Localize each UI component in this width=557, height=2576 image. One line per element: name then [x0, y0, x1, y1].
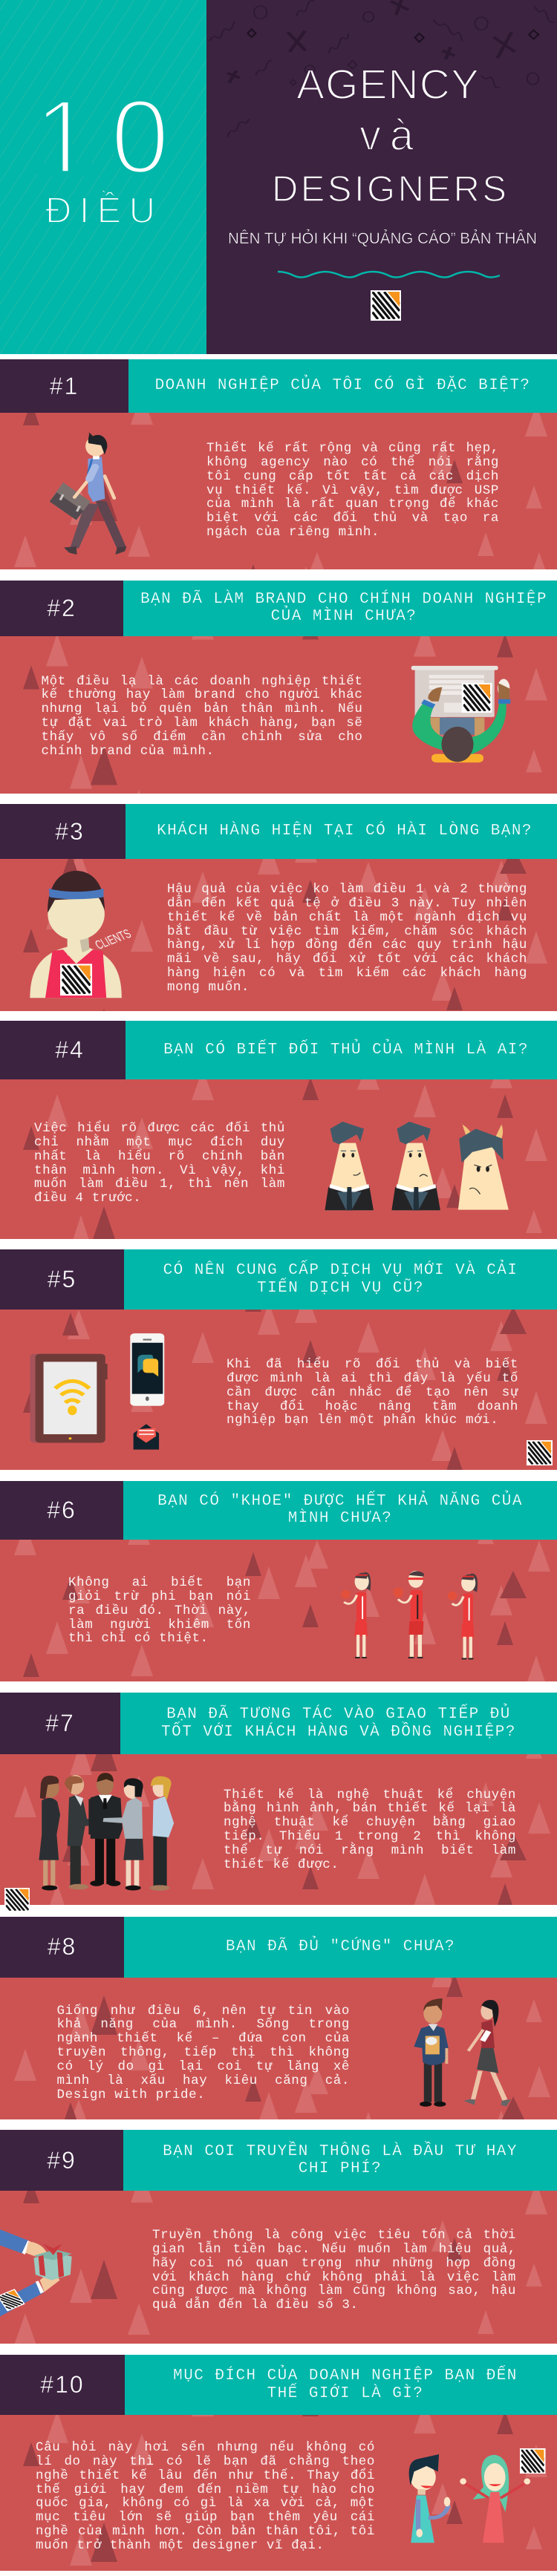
body text 4: thân mình hơn. Vì vậy, khi	[34, 1163, 285, 1178]
word designers: DESIGNERS	[272, 169, 506, 209]
body text 6: thì chỉ có thiệt.	[68, 1631, 209, 1646]
heading 2: CỦA MÌNH CHƯA?	[271, 608, 417, 625]
body text 7: bằng hình ảnh, bán thiết kế lại là	[224, 1801, 516, 1816]
body text 9: Truyền thông là công việc tiêu tốn cả thời	[152, 2228, 516, 2243]
body text 5: được mình là ai thì đây là yếu tố	[227, 1371, 518, 1386]
body text 8: Giống như điều 6, nên tự tin vào	[56, 2004, 350, 2018]
doodle background	[209, 0, 554, 137]
number badge 6	[0, 1481, 123, 1540]
panel background 3	[0, 859, 557, 1011]
body text 3: Hậu quả của việc ko làm điều 1 và 2 thường	[167, 882, 527, 897]
illustration: three rival characters	[325, 1121, 509, 1210]
section 5	[0, 1249, 557, 1470]
body text 10: muốn trở thành một designer vĩ đại.	[36, 2538, 325, 2553]
body text 10: quốc gia, không có gì là xa vời cả, một	[36, 2496, 375, 2511]
section 10	[0, 2355, 557, 2571]
number badge 7	[0, 1693, 120, 1754]
number badge 10: #10	[40, 2371, 85, 2398]
heading 5: CÓ NÊN CUNG CẤP DỊCH VỤ MỚI VÀ CẢI	[163, 1262, 518, 1279]
body text 10: lí do này thì có lẽ bạn đã chẳng theo	[36, 2454, 375, 2469]
heading 7: BẠN ĐÃ TƯƠNG TÁC VÀO GIAO TIẾP ĐỦ	[166, 1706, 511, 1723]
illustration: client portrait	[30, 871, 134, 998]
body text 9	[152, 2229, 516, 2312]
number badge 3	[0, 804, 126, 859]
body text 8: khả năng của mình. Sống trong	[56, 2017, 350, 2032]
section 2	[0, 581, 557, 794]
number badge 5	[0, 1249, 124, 1310]
wave divider	[278, 270, 500, 278]
heading 9: BẠN COI TRUYỀN THÔNG LÀ ĐẦU TƯ HAY	[163, 2143, 518, 2160]
body text 4: Việc hiểu rõ được các đối thủ	[34, 1121, 285, 1136]
body text 10	[36, 2441, 375, 2553]
word dieu: ĐIỀU	[45, 191, 155, 231]
heading 5	[124, 1249, 557, 1310]
body text 3	[167, 882, 527, 995]
body text 10: nghề của mình hơn. Còn bản thân tôi, tôi	[36, 2524, 375, 2539]
heading 7: TỐT VỚI KHÁCH HÀNG VÀ ĐỒNG NGHIỆP?	[161, 1724, 516, 1740]
word agency: AGENCY	[296, 61, 479, 108]
body text 2: thấy vô số điểm cần chỉnh sửa cho	[42, 730, 362, 745]
body text 1: vụ thiết kế. Vì vậy, tìm được USP	[206, 483, 499, 498]
body text 5: Khi đã hiểu rõ đối thủ và biết	[227, 1357, 518, 1372]
number badge 10	[0, 2355, 125, 2415]
teal panel with title number	[0, 0, 206, 354]
heading 4	[126, 1021, 557, 1079]
body text 6: giỏi trừ phi bạn nói	[68, 1589, 251, 1604]
body text 2	[42, 674, 362, 759]
body text 1: tôi cung cấp tốt tất cả các dịch	[206, 469, 499, 484]
panel background 2	[0, 636, 557, 794]
illustration: happy couple	[407, 2452, 533, 2545]
heading 9	[123, 2130, 557, 2191]
heading 3: KHÁCH HÀNG HIỆN TẠI CÓ HÀI LÒNG BẠN?	[157, 823, 532, 840]
illustration: man and woman walking	[414, 1998, 511, 2107]
body text 8	[56, 2004, 350, 2102]
heading 7	[120, 1693, 557, 1754]
body text 7: thiết kế được.	[224, 1857, 339, 1872]
body text 5	[227, 1357, 518, 1428]
number badge 5: #5	[48, 1266, 76, 1292]
purple panel	[206, 0, 557, 354]
body text 6: ra điều đó. Thời này,	[68, 1604, 251, 1618]
body text 5: nghiệp bạn lên một phân khúc mới.	[227, 1413, 498, 1428]
number badge 9	[0, 2130, 123, 2191]
body text 1: biệt với các đối thủ và tạo ra	[206, 511, 499, 526]
hero text	[34, 61, 537, 247]
number badge 8: #8	[48, 1933, 76, 1960]
section 3	[0, 804, 557, 1011]
body text 1: không agency nào có thể nói rằng	[206, 455, 499, 470]
heading 2	[123, 581, 557, 636]
panel background 6	[0, 1540, 557, 1681]
logo	[4, 1888, 30, 1911]
body text 4: nhất là hiểu rõ chính bản	[34, 1149, 285, 1164]
panel background 1	[0, 413, 557, 569]
heading 10: MỤC ĐÍCH CỦA DOANH NGHIỆP BẠN ĐẾN	[173, 2367, 518, 2384]
heading 1	[128, 359, 557, 413]
panel background 4	[0, 1079, 557, 1239]
illustration: tablet, phone and envelope	[30, 1333, 165, 1450]
logo	[527, 1440, 553, 1465]
body text 3: hàng, xử lí hợp đồng đến các quy trình hậu	[167, 938, 527, 952]
number 10: 10	[34, 78, 169, 196]
body text 10: mục tiêu lớn sẽ giúp bạn thêm yêu cái	[36, 2510, 375, 2525]
number badge 2	[0, 581, 123, 636]
heading 3	[126, 804, 557, 859]
heading 4: BẠN CÓ BIẾT ĐỐI THỦ CỦA MÌNH LÀ AI?	[163, 1042, 529, 1059]
body text 2: nhưng lại bỏ quên bản thân mình. Nếu	[42, 702, 362, 716]
section 4	[0, 1021, 557, 1239]
number badge 1	[0, 359, 128, 413]
logo	[520, 2448, 545, 2474]
body text 9: quả dẫn đến là điều số 3.	[152, 2298, 359, 2312]
heading 10	[125, 2355, 557, 2415]
section 6	[0, 1481, 557, 1681]
number badge 7: #7	[45, 1710, 75, 1736]
body text 1: của mình là rất quan trọng để khác	[206, 497, 499, 511]
number badge 4: #4	[55, 1036, 85, 1063]
body text 4: chỉ nhằm một mục đích duy	[34, 1135, 285, 1150]
body text 8: mình là xấu hay kiêu căng cả.	[56, 2073, 350, 2088]
number badge 4	[0, 1021, 126, 1079]
number badge 3: #3	[55, 818, 85, 845]
body text 5: thay đổi hoặc nâng tầm doanh	[227, 1399, 518, 1414]
heading 8: BẠN ĐÃ ĐỦ "CỨNG" CHƯA?	[226, 1938, 455, 1955]
body text 1: Thiết kế rất rộng và cũng rất hẹp,	[206, 441, 499, 456]
heading 8	[124, 1917, 557, 1978]
body text 4: điều 4 trước.	[34, 1191, 141, 1206]
body text 3: thiết kế về bản chất là một ngành dịch vụ	[167, 910, 527, 925]
body text 2: kế thường hay làm brand cho người khác	[42, 687, 362, 702]
body text 1	[206, 441, 499, 540]
body text 7: Thiết kế là nghệ thuật kể chuyện	[224, 1788, 516, 1802]
heading 6	[123, 1481, 557, 1540]
number badge 8	[0, 1917, 124, 1978]
body text 1: ngách của riêng mình.	[206, 525, 380, 540]
illustration: three basketball players	[342, 1571, 478, 1660]
heading 9: CHI PHÍ?	[299, 2160, 382, 2177]
body text 7: thể tự nói rằng mình biết làm	[224, 1843, 516, 1858]
panel background 9	[0, 2191, 557, 2344]
heading 6: BẠN CÓ "KHOE" ĐƯỢC HẾT KHẢ NĂNG CỦA	[157, 1493, 523, 1510]
section 8	[0, 1917, 557, 2119]
body text 8: ngành thiết kế – đứa con của	[56, 2031, 350, 2046]
panel background 10	[0, 2415, 557, 2571]
body text 9: hãy coi nó quan trọng như những hợp đồng	[152, 2256, 516, 2271]
body text 9: cũng được mà không làm cũng không sao, hậu	[152, 2284, 516, 2298]
body text 8: Design with pride.	[56, 2088, 205, 2102]
number badge 6: #6	[47, 1497, 76, 1523]
body text 2: chính brand của mình.	[42, 744, 215, 759]
number badge 2: #2	[47, 595, 76, 621]
body text 2: tự đặt vai trò làm khách hàng, bạn sẽ	[42, 716, 362, 730]
body text 6: làm người khiêm tốn	[68, 1618, 251, 1632]
heading 6: MÌNH CHƯA?	[288, 1510, 392, 1527]
body text 3: mong muốn.	[167, 980, 250, 995]
body text 10: thế giới hay đem đến niềm tự hào cho	[36, 2482, 375, 2497]
heading 10: THẾ GIỚI LÀ GÌ?	[267, 2384, 423, 2402]
body text 10: Câu hỏi này hơi sến nhưng nếu không có	[36, 2440, 375, 2455]
illustration: five colleagues shaking hands	[39, 1773, 174, 1891]
body text 7: tiếp. Thiếu 1 trong 2 thì không	[224, 1829, 516, 1844]
body text 2: Một điều lạ là các doanh nghiệp thiết	[42, 674, 362, 689]
logo	[371, 290, 401, 321]
body text 3: mãi về sau, hãy đối xử tốt với các khách	[167, 952, 527, 967]
body text 9: với khách hàng chứ không phải là việc làm	[152, 2270, 516, 2285]
illustration: person at laptop from above	[411, 665, 511, 763]
section 9	[0, 2130, 557, 2344]
body text 4	[34, 1121, 285, 1206]
body text 6	[68, 1575, 251, 1646]
panel background 8	[0, 1978, 557, 2119]
number badge 9: #9	[47, 2147, 76, 2174]
heading 5: TIẾN DỊCH VỤ CŨ?	[257, 1280, 424, 1296]
body text 8: truyền thông, tiếp thị thì không	[56, 2045, 350, 2060]
body text 6: Không ai biết bạn	[68, 1575, 251, 1590]
panel background 5	[0, 1310, 557, 1470]
body text 7: nghệ thuật kể chuyện bằng giao	[224, 1815, 516, 1830]
body text 4: muốn làm điều 1, thì nên làm	[34, 1177, 285, 1191]
body text 9: gian lẫn tiền bạc. Nếu muốn làm hiệu quả,	[152, 2242, 516, 2257]
body text 8: có lý do gì lại coi tự lăng xê	[56, 2059, 350, 2074]
body text 3: hàng hiện có và tìm kiếm các khách hàng	[167, 966, 527, 981]
illustration: walking man with briefcase	[49, 432, 126, 555]
body text 7	[224, 1788, 516, 1872]
body text 3: dẫn đến kết quả tệ ở điều 3 này. Tuy nhiên	[167, 896, 527, 911]
body text 10: nghề thiết kế lâu đến như thế. Thay đổi	[36, 2468, 375, 2483]
section 7	[0, 1693, 557, 1905]
illustration: hands exchanging gift	[0, 2229, 74, 2318]
word va: và	[359, 111, 414, 160]
number badge 1: #1	[50, 373, 79, 399]
panel background 7	[0, 1754, 557, 1905]
subtitle: NÊN TỰ HỎI KHI “QUẢNG CÁO” BẢN THÂN	[228, 229, 537, 247]
body text 3: bắt đầu từ việc tìm kiếm, chăm sóc khách	[167, 924, 527, 939]
heading 1: DOANH NGHIỆP CỦA TÔI CÓ GÌ ĐẶC BIỆT?	[155, 377, 530, 394]
hero banner	[0, 0, 557, 354]
section 1	[0, 359, 557, 569]
heading 2: BẠN ĐÃ LÀM BRAND CHO CHÍNH DOANH NGHIỆP	[140, 591, 547, 608]
body text 5: cần được cân nhắc để tạo nên sự	[227, 1385, 518, 1400]
